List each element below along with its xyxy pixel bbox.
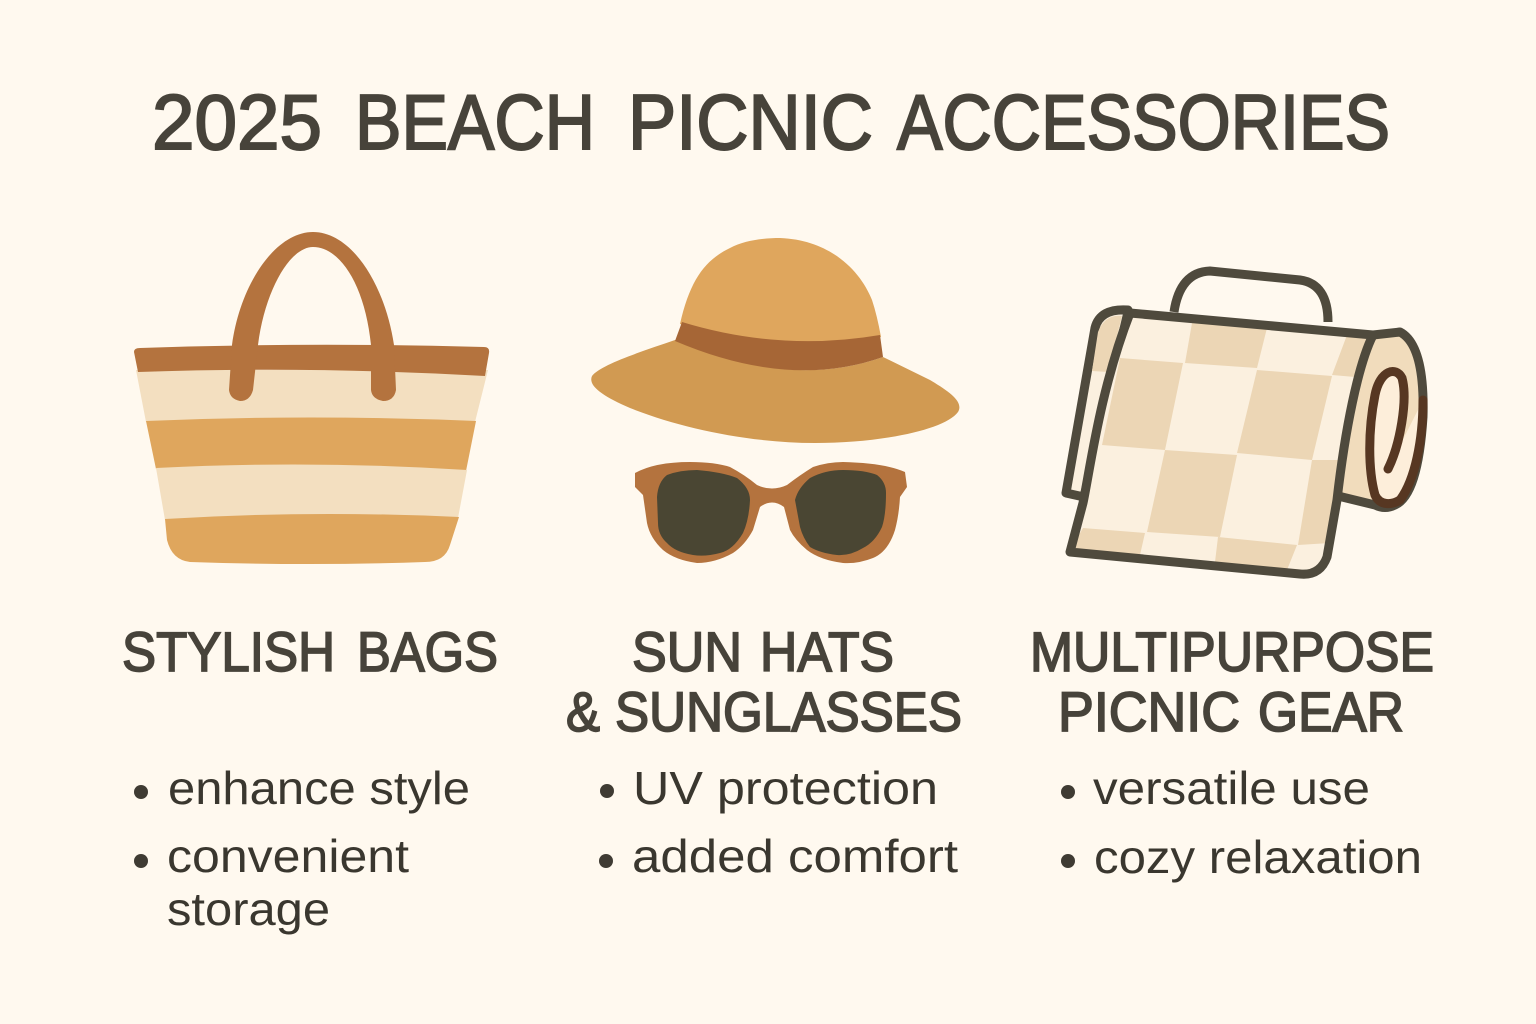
roll body — [1338, 332, 1423, 508]
icon: sunglasses — [635, 462, 907, 563]
bullet list: bags: enhance style — [168, 762, 470, 814]
bullet list: hats — [599, 762, 958, 882]
heading: multipurpose picnic gear — [1030, 620, 1434, 743]
title: BEACH — [355, 78, 595, 166]
roll spiral — [1370, 371, 1423, 504]
icon: striped beach bag — [134, 232, 489, 564]
bullet list: bags — [134, 762, 470, 935]
heading: multipurpose picnic gear: GEAR — [1258, 680, 1404, 743]
heading: sun hats and sunglasses: SUNGLASSES — [615, 680, 962, 743]
bullet list: picnic gear: cozy relaxation — [1094, 831, 1422, 883]
icon: sun hat — [591, 238, 959, 443]
heading: sun hats and sunglasses — [566, 620, 962, 743]
handle — [1174, 271, 1328, 322]
bullet list: picnic gear — [1061, 762, 1422, 883]
heading: sun hats and sunglasses: & — [566, 680, 600, 743]
title: 2025 — [152, 78, 322, 166]
heading: sun hats and sunglasses: HATS — [760, 620, 894, 683]
bullet list: bags: convenient — [167, 830, 409, 882]
sheet outline — [1070, 313, 1373, 574]
heading: multipurpose picnic gear: PICNIC — [1058, 680, 1240, 743]
title: ACCESSORIES — [897, 78, 1390, 166]
heading: multipurpose picnic gear: MULTIPURPOSE — [1030, 620, 1434, 683]
bullet list: hats: added comfort — [632, 830, 958, 882]
heading: stylish bags: BAGS — [357, 620, 498, 683]
back flap — [1066, 310, 1128, 497]
bullet list: picnic gear: versatile use — [1093, 762, 1370, 814]
title: PICNIC — [628, 78, 873, 166]
checker squares — [1070, 323, 1373, 570]
bullet list: bags: storage — [167, 883, 330, 935]
bullet list: hats: UV protection — [633, 762, 938, 814]
heading: stylish bags — [122, 620, 498, 683]
heading: stylish bags: STYLISH — [122, 620, 335, 683]
sheet — [1070, 313, 1373, 574]
heading: sun hats and sunglasses: SUN — [632, 620, 742, 683]
title — [152, 78, 1390, 166]
icon: rolled picnic blanket — [1066, 271, 1423, 574]
